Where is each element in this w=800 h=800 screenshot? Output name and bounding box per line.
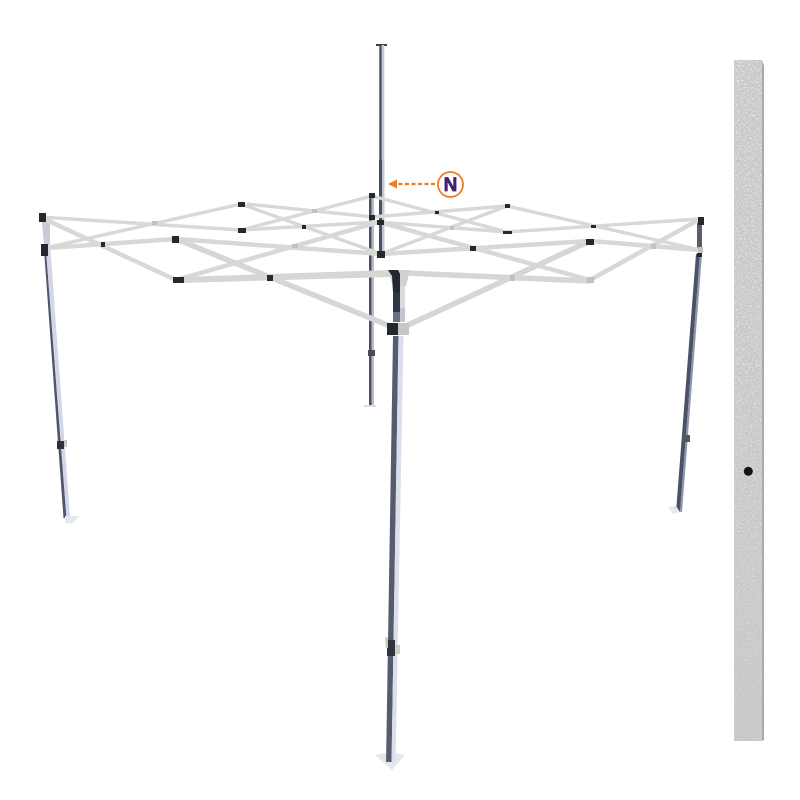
right corner leg <box>668 222 702 514</box>
callout badge N: N <box>444 175 457 196</box>
close-up of textured pole <box>734 60 764 741</box>
front corner leg <box>375 284 405 770</box>
arrow pointing to centre pole <box>388 180 435 188</box>
truss: middle scissor beams <box>40 217 700 280</box>
centre pole <box>376 44 387 255</box>
truss: front scissor beams <box>176 239 590 326</box>
pole hole <box>744 467 753 476</box>
truss: back and side scissor beams <box>40 196 700 254</box>
callout badge N <box>438 172 463 197</box>
truss brackets and hinges <box>39 193 704 283</box>
left corner leg <box>42 222 79 524</box>
light hinges <box>152 209 703 283</box>
back leg pole <box>364 195 376 407</box>
front corner top and slider brackets <box>387 270 410 335</box>
